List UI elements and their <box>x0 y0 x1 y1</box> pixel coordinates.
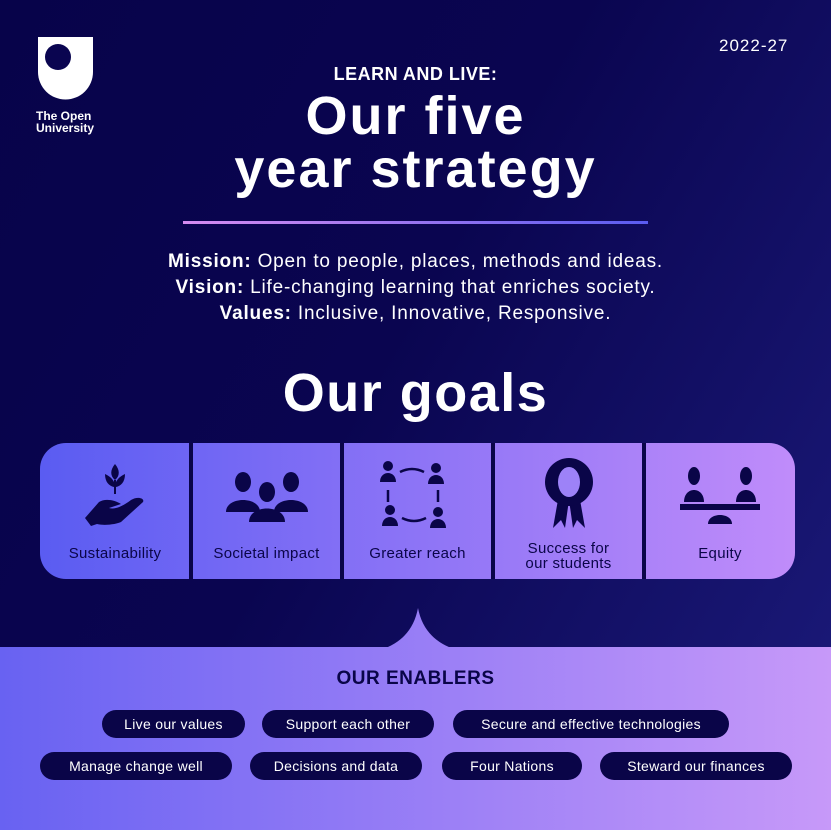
enablers band <box>0 647 831 830</box>
icon: group of people <box>226 472 308 522</box>
enabler pills: Manage change well <box>69 758 203 774</box>
enablers heading: OUR ENABLERS <box>336 668 494 689</box>
goal: greater reach: Greater reach <box>369 545 466 562</box>
goal: societal impact: Societal impact <box>213 545 320 562</box>
goal: sustainability: Sustainability <box>69 545 161 562</box>
goals heading: Our goals <box>283 363 548 423</box>
enabler pills: Live our values <box>124 716 223 732</box>
logo <box>36 37 94 135</box>
subtitle: LEARN AND LIVE: <box>334 64 497 84</box>
goals panel <box>40 443 795 647</box>
underline <box>183 221 648 224</box>
mission vision values: Vision: Life-changing learning that enriches society. <box>176 277 656 298</box>
goal: greater reach <box>369 461 466 562</box>
logo: The Open <box>36 109 91 123</box>
enabler pills: Decisions and data <box>274 758 398 774</box>
title <box>234 86 597 199</box>
mission vision values <box>168 251 663 324</box>
mission vision values: Mission: Open to people, places, methods and ideas. <box>168 251 663 272</box>
logo: University <box>36 121 94 135</box>
goal: societal impact <box>213 472 320 562</box>
title: year strategy <box>234 139 597 199</box>
mission vision values: Values: Inclusive, Innovative, Responsive. <box>220 303 611 324</box>
icon: balance <box>680 467 760 524</box>
goal: equity <box>680 467 760 562</box>
icon: hand with plant <box>85 464 144 526</box>
icon: rosette <box>545 458 593 528</box>
goal: success for students: Success for <box>528 540 609 557</box>
enabler pills: Secure and effective technologies <box>481 716 701 732</box>
goal: success for students: our students <box>525 555 612 572</box>
icon: connected people <box>380 461 446 528</box>
title: Our five <box>305 86 526 146</box>
date: 2022-27 <box>719 36 788 55</box>
enabler pills: Support each other <box>286 716 410 732</box>
enabler pills: Steward our finances <box>627 758 765 774</box>
enabler pills <box>40 710 792 780</box>
enabler pills: Four Nations <box>470 758 554 774</box>
goal: success for students <box>525 458 612 572</box>
goal: equity: Equity <box>698 545 742 562</box>
goal: sustainability <box>69 464 161 562</box>
